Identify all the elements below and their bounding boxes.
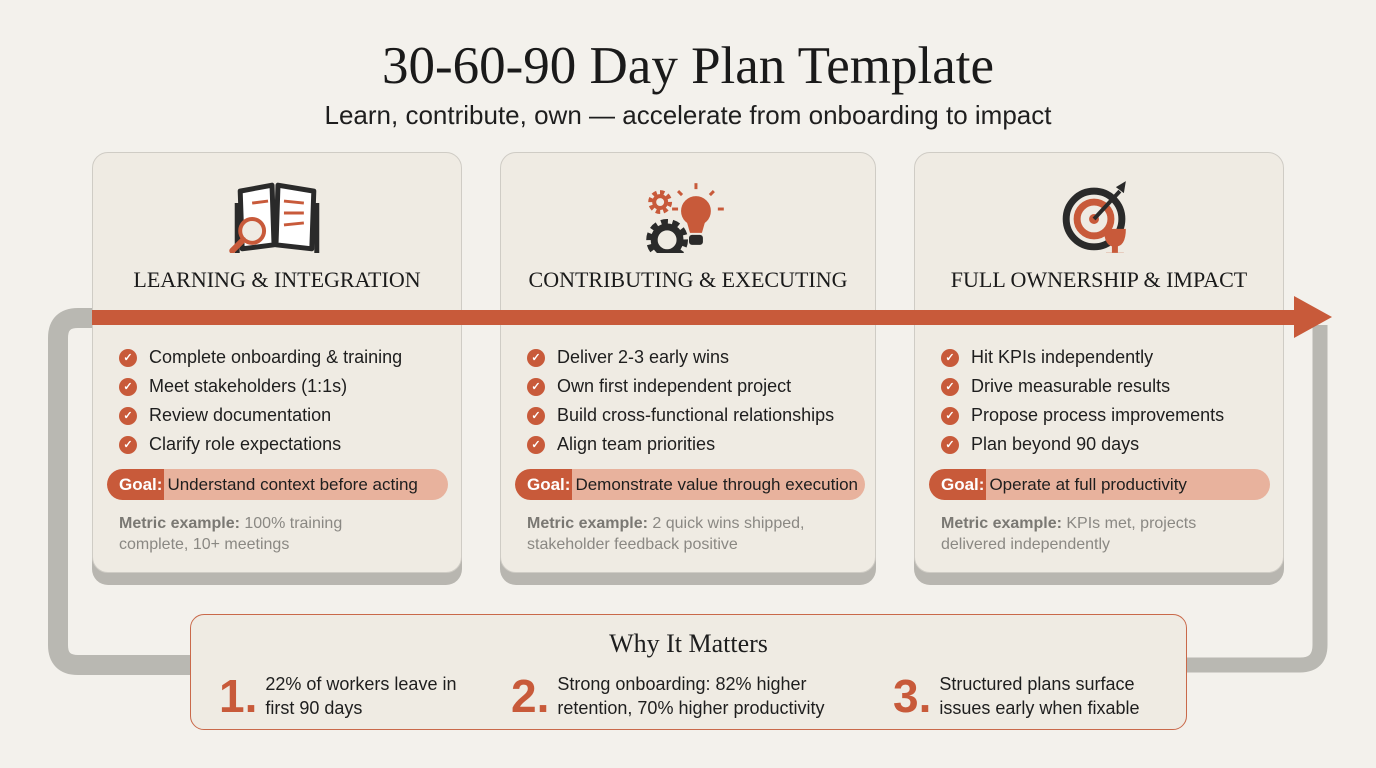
checklist: Align team priorities <box>557 434 715 454</box>
stat 3: 3. <box>893 670 931 722</box>
panel: learning <box>92 152 462 573</box>
checklist: Deliver 2-3 early wins <box>557 347 729 367</box>
panel: contributing <box>500 152 876 573</box>
panel: why it matters <box>190 614 1187 730</box>
checklist <box>941 347 1224 454</box>
checklist: Build cross-functional relationships <box>557 405 834 425</box>
stat 3: issues early when fixable <box>939 698 1139 718</box>
stat 2: retention, 70% higher productivity <box>557 698 825 718</box>
heading: LEARNING & INTEGRATION <box>133 267 421 292</box>
metric <box>941 515 1196 553</box>
metric: complete, 10+ meetings <box>119 536 289 553</box>
heading: Why It Matters <box>609 629 768 658</box>
icon: gears and lightbulb <box>646 183 724 253</box>
stat 2: Strong onboarding: 82% higher <box>557 674 807 694</box>
stat 1 <box>219 670 456 722</box>
goal: Understand context before acting <box>167 475 418 494</box>
checklist <box>527 347 834 454</box>
icon: book with magnifier <box>229 182 320 253</box>
checklist: Review documentation <box>149 405 331 425</box>
goal: Goal: <box>527 475 570 494</box>
stat 1: first 90 days <box>265 698 362 718</box>
metric: stakeholder feedback positive <box>527 536 738 553</box>
goal: Operate at full productivity <box>989 475 1187 494</box>
metric <box>119 515 342 553</box>
checklist: Own first independent project <box>557 376 791 396</box>
metric <box>527 515 804 553</box>
checklist: Meet stakeholders (1:1s) <box>149 376 347 396</box>
checklist: Complete onboarding & training <box>149 347 402 367</box>
checklist: Drive measurable results <box>971 376 1170 396</box>
stat 1: 22% of workers leave in <box>265 674 456 694</box>
goal: Demonstrate value through execution <box>575 475 858 494</box>
arrow: timeline <box>92 296 1332 338</box>
stat 2: 2. <box>511 670 549 722</box>
heading: CONTRIBUTING & EXECUTING <box>529 267 847 292</box>
stat 1: 1. <box>219 670 257 722</box>
metric: Metric example: 2 quick wins shipped, <box>527 515 804 532</box>
goal <box>929 469 1270 500</box>
panel: ownership <box>914 152 1284 573</box>
stat 3: Structured plans surface <box>939 674 1134 694</box>
stat 3 <box>893 670 1139 722</box>
metric: Metric example: 100% training <box>119 515 342 532</box>
metric: delivered independently <box>941 536 1110 553</box>
goal <box>515 469 865 500</box>
icon: target and trophy <box>1062 181 1126 253</box>
metric: Metric example: KPIs met, projects <box>941 515 1196 532</box>
goal <box>107 469 448 500</box>
checklist: Hit KPIs independently <box>971 347 1153 367</box>
stat 2 <box>511 670 825 722</box>
goal: Goal: <box>941 475 984 494</box>
goal: Goal: <box>119 475 162 494</box>
heading: FULL OWNERSHIP & IMPACT <box>951 267 1247 292</box>
checklist <box>119 347 402 454</box>
checklist: Clarify role expectations <box>149 434 341 454</box>
title: 30-60-90 Day Plan Template <box>382 37 994 95</box>
checklist: Plan beyond 90 days <box>971 434 1139 454</box>
checklist: Propose process improvements <box>971 405 1224 425</box>
subtitle: Learn, contribute, own — accelerate from onboarding to impact <box>325 100 1051 130</box>
